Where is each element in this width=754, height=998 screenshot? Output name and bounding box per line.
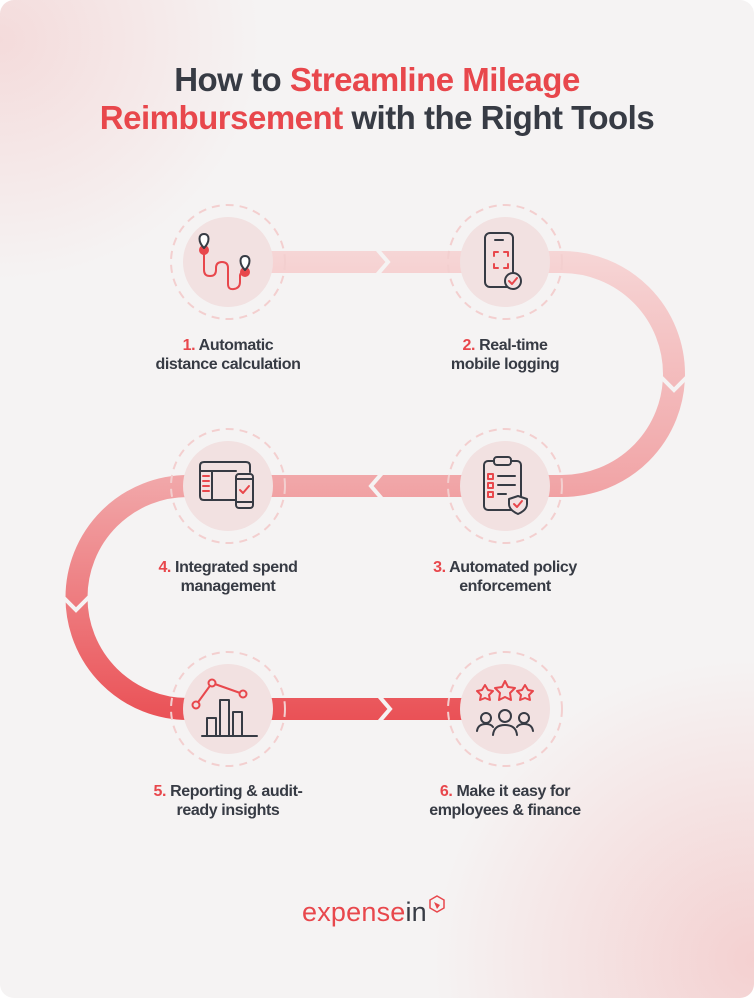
label 3: enforcement: [459, 578, 551, 595]
label 5: [154, 783, 302, 819]
icon: stars and people: [477, 681, 533, 735]
title: How to Streamline Mileage: [174, 61, 580, 98]
label 2: mobile logging: [451, 356, 559, 373]
label 6: [429, 783, 581, 819]
label 3: [433, 559, 578, 595]
label 2: 2. Real-time: [462, 337, 548, 354]
label 5: ready insights: [177, 802, 279, 819]
label 5: 5. Reporting & audit-: [154, 783, 302, 800]
icon: mobile check: [485, 233, 521, 289]
path band: [63, 248, 687, 723]
circles: [171, 205, 562, 766]
label 4: management: [181, 578, 275, 595]
label 1: [156, 337, 300, 373]
label 4: [158, 559, 298, 595]
icon: route pins: [199, 234, 250, 289]
icon: bar chart: [192, 680, 257, 736]
label 3: 3. Automated policy: [433, 559, 577, 576]
logo: expensein: [302, 897, 427, 927]
title: Reimbursement with the Right Tools: [100, 99, 654, 136]
label 6: employees & finance: [429, 802, 581, 819]
label 1: 1. Automatic: [183, 337, 273, 354]
arrows: [63, 248, 687, 723]
label 1: distance calculation: [156, 356, 300, 373]
icon: logo mark: [429, 895, 445, 913]
icon: desktop and mobile: [200, 462, 253, 508]
label 6: 6. Make it easy for: [440, 783, 570, 800]
title: [100, 61, 654, 136]
icon: clipboard shield: [484, 457, 527, 514]
label 4: 4. Integrated spend: [158, 559, 298, 576]
label 2: [451, 337, 559, 373]
